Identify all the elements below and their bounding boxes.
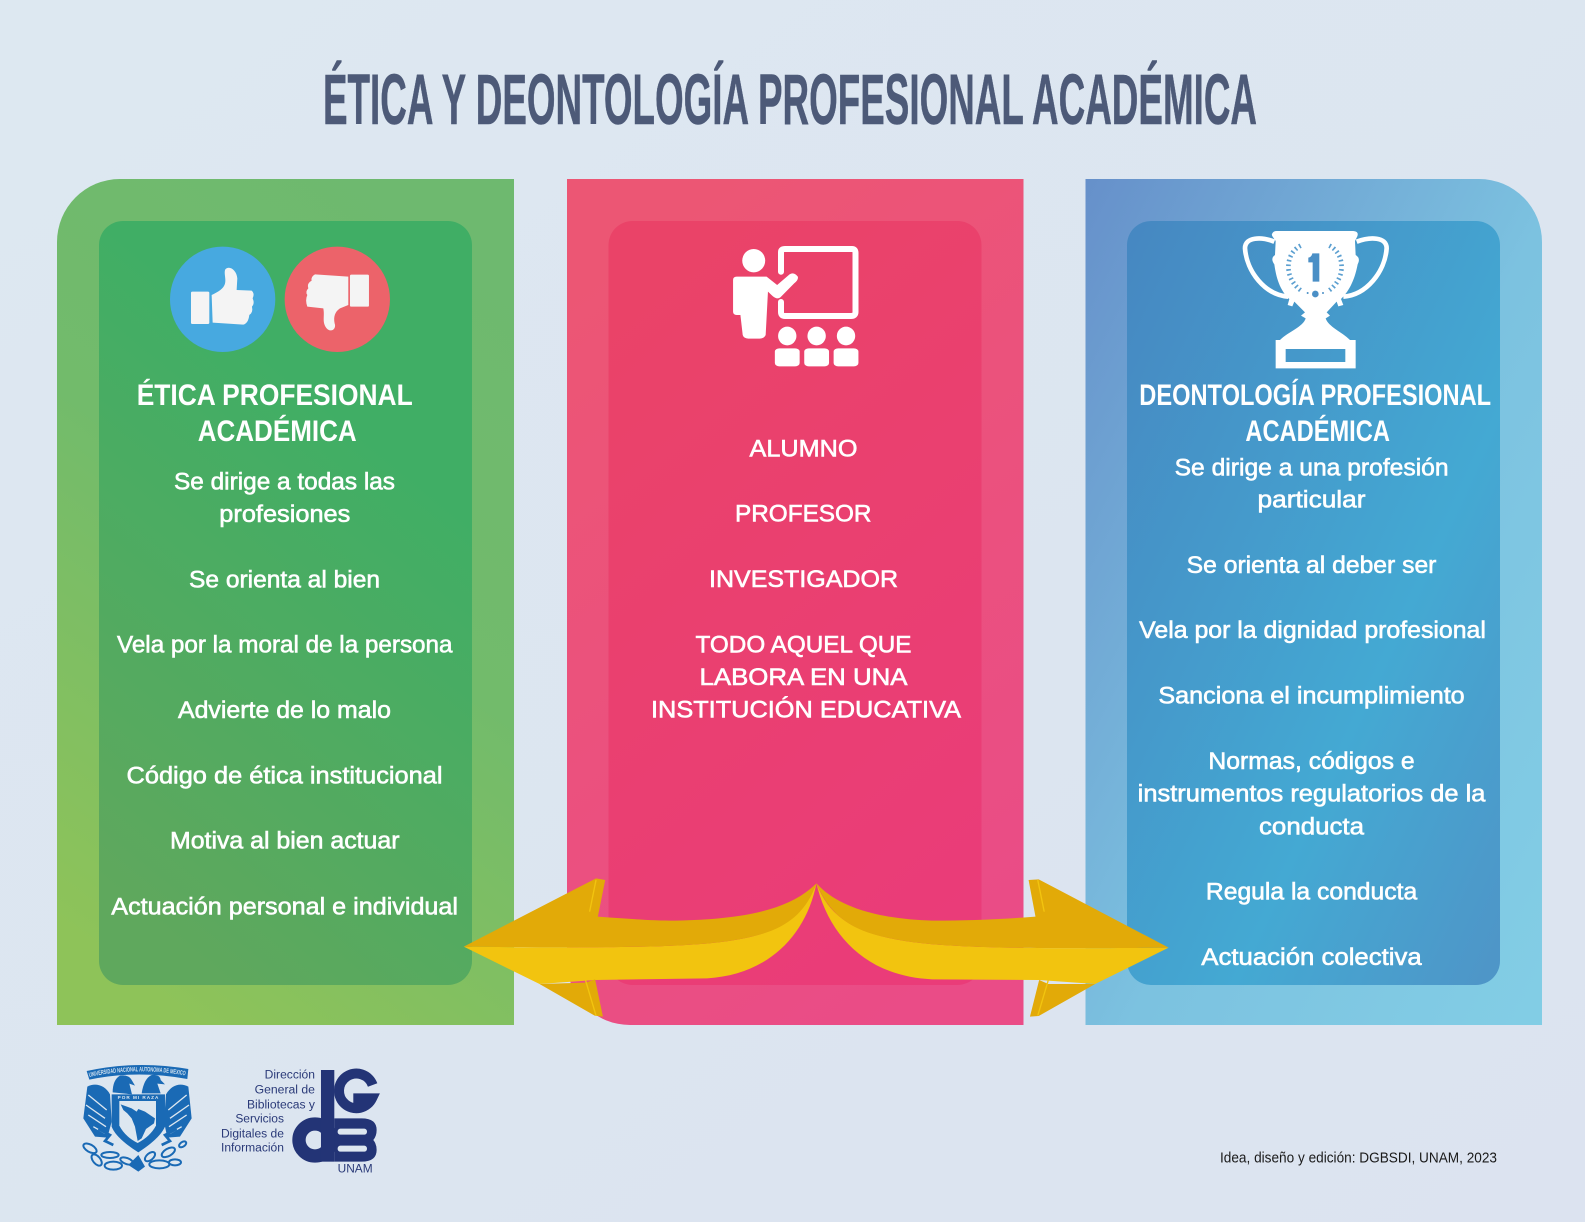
logo text: dirección general: Información [221,1141,284,1155]
list: características de la deontología: conducta [1259,814,1365,840]
list: características de la ética: Vela por la moral de la persona [117,632,453,659]
heading: ética profesional académica: ÉTICA PROFESIONAL [137,378,413,412]
icon: thumbs down [285,247,390,352]
list: características de la deontología: Vela por la dignidad profesional [1139,617,1486,644]
list: características de la deontología: Regula la conducta [1206,879,1418,906]
list: características de la ética: Se dirige a todas las [174,468,395,496]
credit line: Idea, diseño y edición: DGBSDI, UNAM, 2023 [1220,1150,1497,1167]
heading: ética profesional académica [137,378,413,448]
panel: deontología profesional académica [1086,179,1542,1025]
list: actores: INSTITUCIÓN EDUCATIVA [651,697,961,724]
list: características de la deontología: Se dirige a una profesión [1175,454,1449,481]
logo: UNAM crest [82,1065,192,1172]
list: características de la deontología: Actuación colectiva [1201,944,1422,971]
logo text: dirección general: General de [255,1082,315,1096]
icon: teacher with students [733,249,858,366]
icon: trophy [1245,231,1387,368]
list: características de la deontología: Normas, códigos e [1208,748,1415,775]
logo: DGB UNAM [221,1067,377,1176]
logo text: dirección general [221,1067,373,1176]
logo text: dirección general: UNAM [338,1162,373,1176]
heading: deontología profesional académica: DEONTOLOGÍA PROFESIONAL [1139,378,1491,412]
list: actores [651,435,961,724]
list: actores: LABORA EN UNA [700,664,908,691]
icon: thumbs up [170,247,275,352]
panel: ética profesional académica [57,179,514,1025]
list: características de la deontología [1138,454,1486,971]
logo text: dirección general: Bibliotecas y [247,1097,315,1111]
list: características de la ética: Se orienta al bien [189,567,380,594]
list: características de la ética: Código de ética institucional [126,762,442,790]
list: actores: ALUMNO [750,435,858,462]
list: características de la ética: Advierte de lo malo [178,697,391,724]
list: características de la ética: Motiva al bien actuar [170,828,400,855]
list: características de la ética [111,468,458,920]
logo: UNAM crest: POR MI RAZA [118,1095,159,1100]
list: características de la deontología: Se orienta al deber ser [1187,552,1436,579]
list: características de la deontología: Sanciona el incumplimiento [1158,682,1465,710]
list: características de la deontología: particular [1258,487,1366,514]
logo: UNAM crest: UNIVERSIDAD NACIONAL AUTONOMA DE MEXICO [88,1066,186,1077]
list: características de la deontología: instrumentos regulatorios de la [1138,781,1486,808]
logo text: dirección general: Digitales de [221,1126,284,1140]
heading: deontología profesional académica [1139,378,1491,448]
heading: deontología profesional académica: ACADÉMICA [1245,414,1390,448]
list: actores: TODO AQUEL QUE [696,632,912,658]
list: actores: INVESTIGADOR [709,566,898,593]
logo text: dirección general: Servicios [235,1112,284,1126]
list: características de la ética: profesiones [219,501,350,528]
arrow: left, toward ética [464,878,816,1017]
arrow: right, toward deontología [816,879,1169,1017]
panel: actores [567,179,1024,1025]
logo text: dirección general: Dirección [265,1067,315,1081]
list: características de la ética: Actuación personal e individual [111,893,458,920]
list: actores: PROFESOR [735,501,872,528]
heading: ética profesional académica: ACADÉMICA [198,414,357,448]
